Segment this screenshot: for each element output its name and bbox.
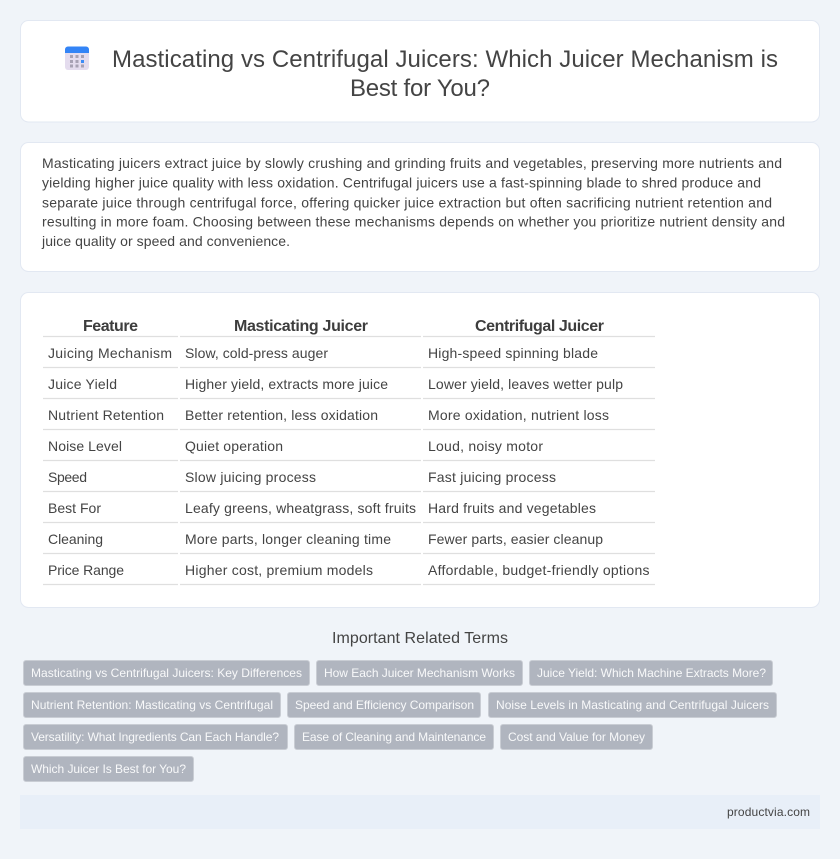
- tag: [488, 692, 776, 718]
- tag: [24, 692, 280, 718]
- row: best for: Best For: [48, 500, 101, 516]
- tag: Versatility: What Ingredients Can Each Handle?: [31, 730, 279, 744]
- row: price range: [48, 562, 650, 578]
- row: nutrient retention: More oxidation, nutrient loss: [428, 407, 609, 423]
- tag: [288, 692, 480, 718]
- tag: [316, 660, 522, 686]
- row: juicing mechanism: High-speed spinning blade: [428, 345, 598, 361]
- row: nutrient retention: Nutrient Retention: [48, 407, 164, 423]
- intro text block: Masticating juicers extract juice by slowly crushing and grinding fruits and vegetables, preserving more nutrients and: [42, 155, 782, 171]
- row: noise level: [48, 438, 543, 454]
- row: juicing mechanism: [48, 345, 598, 361]
- row: speed: Fast juicing process: [428, 469, 556, 485]
- row: noise level: Quiet operation: [185, 438, 283, 454]
- intro text block: juice quality or speed and convenience.: [41, 233, 290, 249]
- footer source: productvia.com: [727, 805, 810, 819]
- table header: [83, 318, 604, 335]
- row: speed: [48, 469, 556, 485]
- panel: related term tags: [24, 660, 776, 782]
- tag: Speed and Efficiency Comparison: [295, 698, 474, 712]
- tag: [530, 660, 772, 686]
- tag: How Each Juicer Mechanism Works: [324, 666, 515, 680]
- panel: title header: [20, 20, 820, 122]
- row: juice yield: [48, 376, 623, 392]
- tag: Masticating vs Centrifugal Juicers: Key Differences: [31, 666, 302, 680]
- row: best for: [48, 500, 596, 516]
- row: nutrient retention: Better retention, less oxidation: [185, 407, 378, 423]
- tag: Cost and Value for Money: [508, 730, 645, 744]
- table header: Masticating Juicer: [234, 318, 368, 335]
- tag: [500, 724, 652, 750]
- tag: Juice Yield: Which Machine Extracts More?: [537, 666, 766, 680]
- row: cleaning: Fewer parts, easier cleanup: [428, 531, 603, 547]
- icon: calendar: [65, 46, 89, 70]
- row: juice yield: Juice Yield: [48, 376, 117, 392]
- table header: Centrifugal Juicer: [475, 318, 604, 335]
- row: cleaning: More parts, longer cleaning time: [185, 531, 391, 547]
- tag: Ease of Cleaning and Maintenance: [302, 730, 486, 744]
- row: juice yield: Higher yield, extracts more juice: [185, 376, 388, 392]
- row: best for: Leafy greens, wheatgrass, soft fruits: [185, 500, 416, 516]
- title: [112, 46, 778, 102]
- tag: Which Juicer Is Best for You?: [31, 762, 186, 776]
- panel: introduction: [20, 142, 820, 272]
- tag: [24, 660, 310, 686]
- title: Best for You?: [350, 75, 490, 102]
- row: price range: Higher cost, premium models: [185, 562, 373, 578]
- row: juicing mechanism: Slow, cold-press auger: [185, 345, 328, 361]
- row: noise level: Loud, noisy motor: [428, 438, 543, 454]
- title: Masticating vs Centrifugal Juicers: Which Juicer Mechanism is: [112, 46, 778, 73]
- table header: Feature: [83, 318, 138, 335]
- heading: important related terms: Important Related Terms: [332, 630, 508, 647]
- row: speed: Slow juicing process: [185, 469, 316, 485]
- footer bar: [20, 795, 820, 829]
- tag: Nutrient Retention: Masticating vs Centrifugal: [31, 698, 273, 712]
- row: speed: Speed: [48, 469, 87, 485]
- row: cleaning: [48, 531, 603, 547]
- row: cleaning: Cleaning: [48, 531, 103, 547]
- intro text block: yielding higher juice quality with less oxidation. Centrifugal juicers use a fast-spinning blade to shred produce and: [42, 174, 761, 190]
- row: price range: Affordable, budget-friendly options: [428, 562, 650, 578]
- tag: [24, 724, 288, 750]
- row: juice yield: Lower yield, leaves wetter pulp: [428, 376, 623, 392]
- intro text block: [41, 155, 785, 249]
- row: best for: Hard fruits and vegetables: [428, 500, 596, 516]
- row: price range: Price Range: [48, 562, 124, 578]
- tag: [24, 756, 194, 782]
- tag: Noise Levels in Masticating and Centrifugal Juicers: [496, 698, 769, 712]
- panel: comparison table: [20, 292, 820, 608]
- intro text block: separate juice through centrifugal force, offering quicker juice extraction but often sacrificing nutrient retention and: [42, 194, 772, 210]
- row: nutrient retention: [48, 407, 609, 423]
- tag: [294, 724, 494, 750]
- row: noise level: Noise Level: [48, 438, 122, 454]
- intro text block: resulting in more foam. Choosing between these mechanisms depends on whether you prioritize nutrient density and: [42, 214, 785, 230]
- row: juicing mechanism: Juicing Mechanism: [48, 345, 172, 361]
